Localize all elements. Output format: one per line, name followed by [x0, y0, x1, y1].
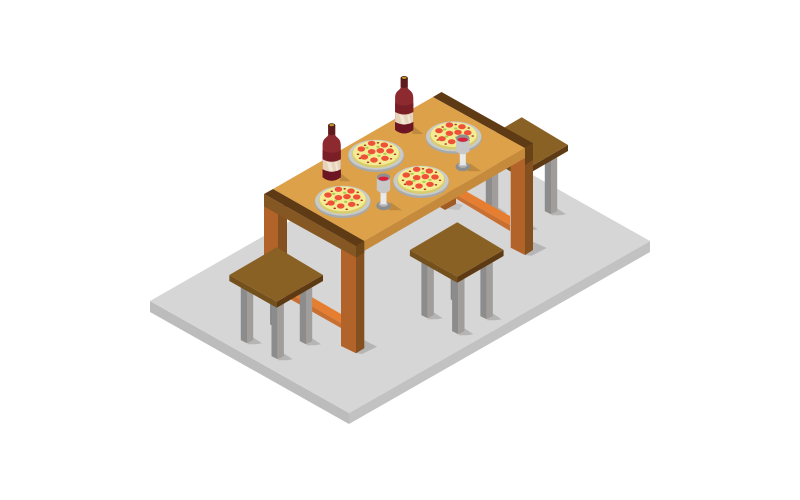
middle stool	[410, 222, 504, 335]
table leg shadows	[356, 203, 547, 354]
table top	[264, 92, 533, 258]
front right table leg	[511, 150, 533, 255]
far stool	[474, 117, 568, 230]
left stool	[229, 247, 323, 360]
wine glass: left	[376, 173, 402, 210]
stretcher: right	[430, 171, 510, 231]
pizza: middle right	[393, 166, 449, 198]
wine bottle: right	[395, 76, 423, 134]
wine glass: right	[456, 134, 481, 171]
pizza: front left	[315, 186, 371, 218]
stretcher: left	[260, 267, 341, 328]
far table leg	[264, 200, 287, 290]
back table leg	[440, 198, 456, 210]
pizza: far right	[426, 121, 482, 154]
wine bottle: left	[323, 123, 351, 181]
front left table leg	[341, 240, 364, 353]
floor platform	[150, 129, 650, 424]
pizza: upper centre	[348, 140, 404, 172]
